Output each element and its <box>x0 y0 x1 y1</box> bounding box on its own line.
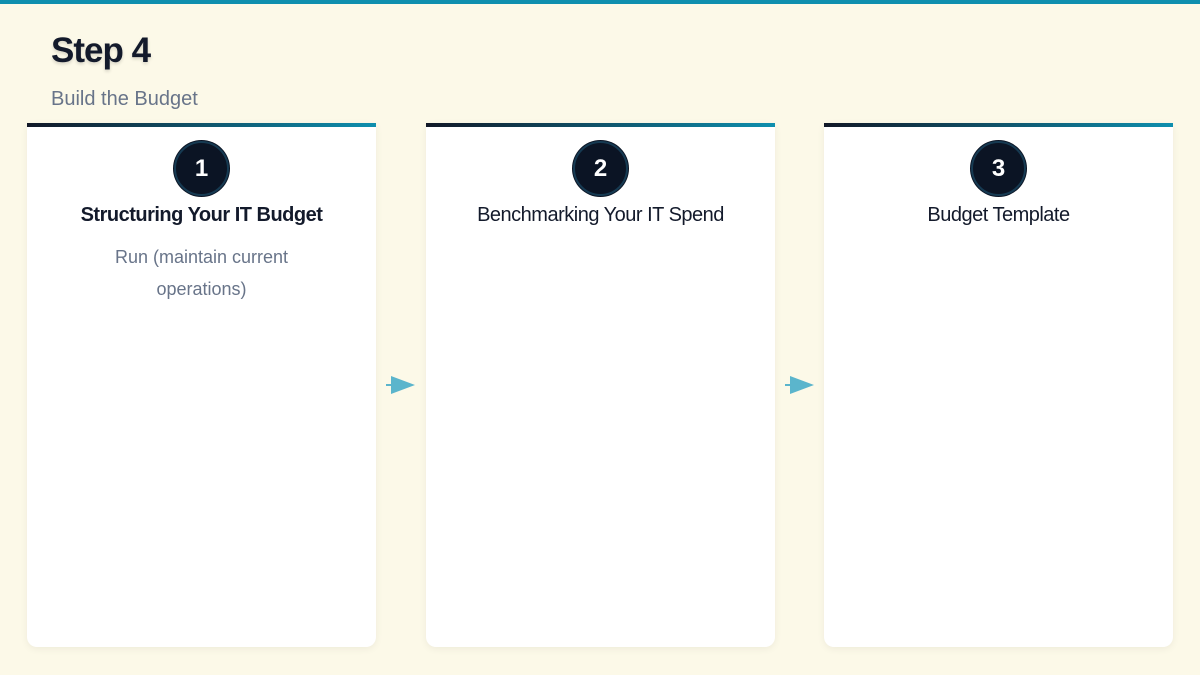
badge 2: 2 <box>594 155 607 182</box>
arrow 2 <box>785 376 814 394</box>
panel: step 1 <box>27 123 376 647</box>
title: Step 4 <box>51 31 150 70</box>
heading 2: Benchmarking Your IT Spend <box>477 204 724 226</box>
panel: step 3 <box>824 123 1173 647</box>
subtitle: Build the Budget <box>51 88 198 110</box>
badge 3 <box>971 141 1026 196</box>
text 1: Run (maintain current operations) <box>115 247 288 299</box>
badge 3: 3 <box>992 155 1005 182</box>
panel: step 2 <box>426 123 775 647</box>
arrow 1 <box>386 376 415 394</box>
heading 1: Structuring Your IT Budget <box>81 204 322 226</box>
badge 2 <box>573 141 628 196</box>
badge 1 <box>174 141 229 196</box>
badge 1: 1 <box>195 155 208 182</box>
heading 3: Budget Template <box>927 204 1070 226</box>
